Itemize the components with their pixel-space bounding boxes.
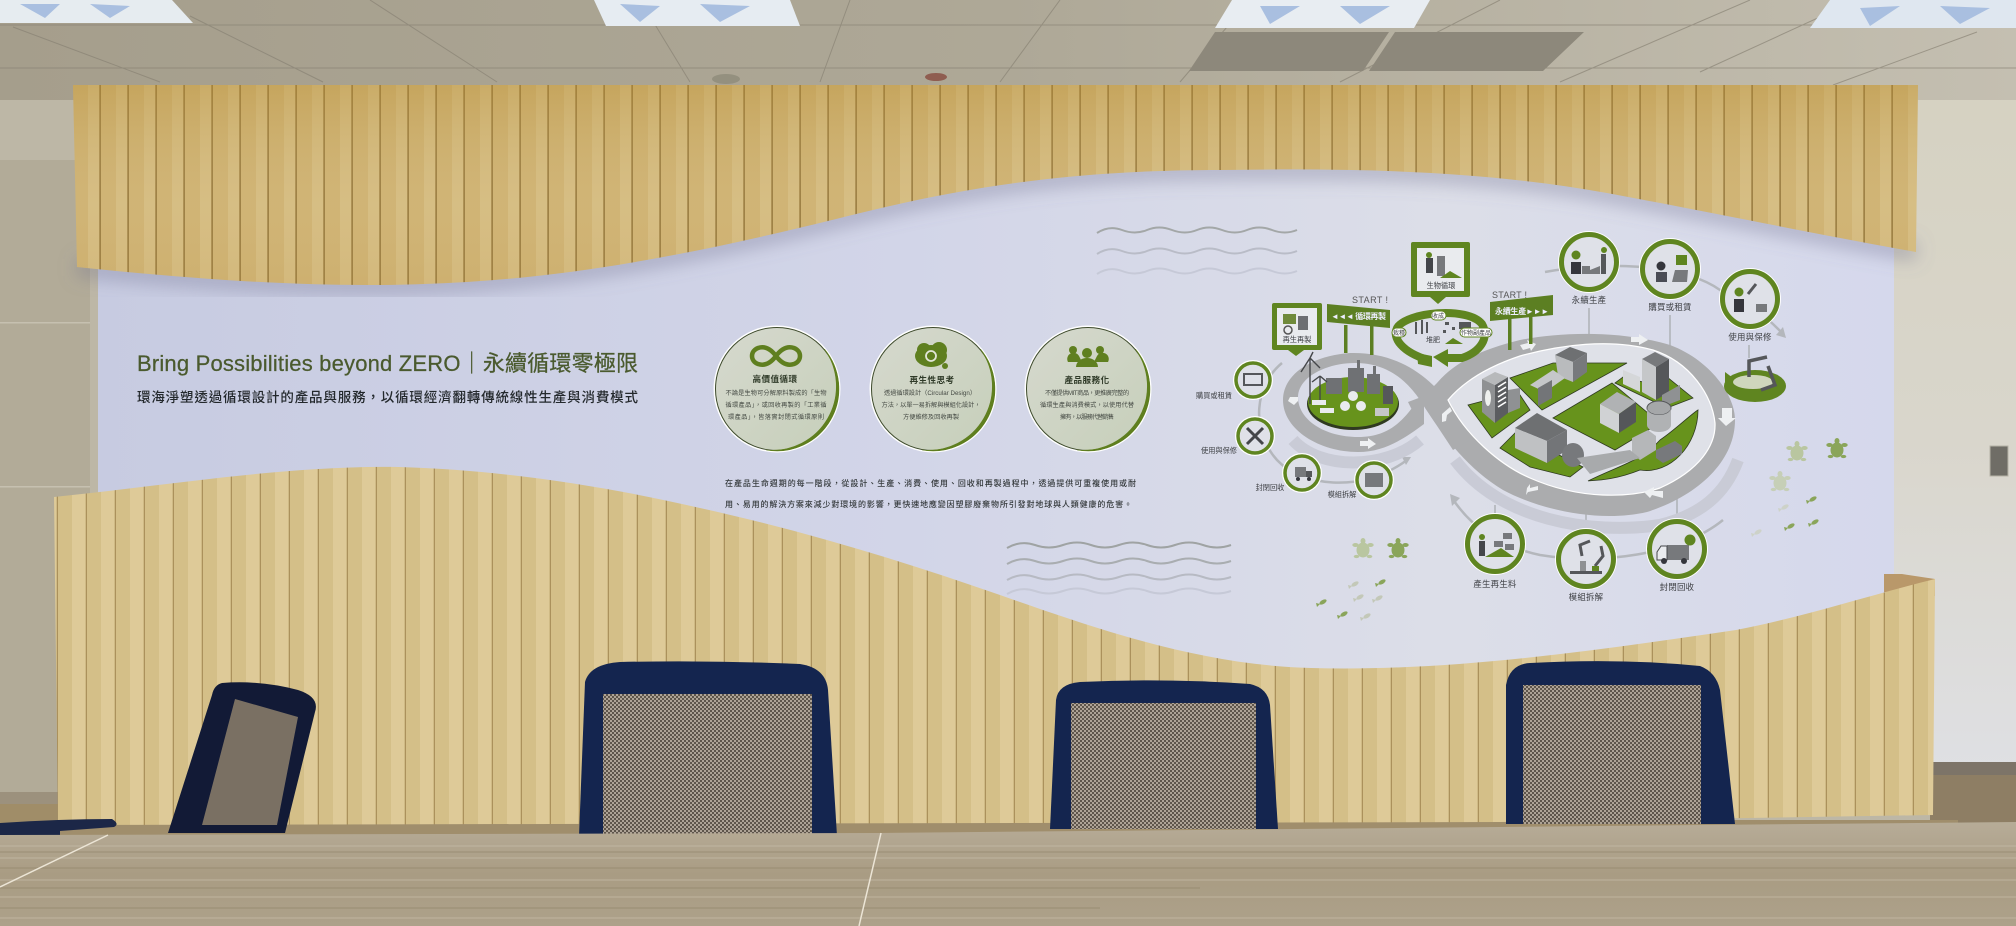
circle: product as a service: 產品服務化 [1065,374,1109,385]
connecting arcs [1259,266,1782,559]
right lobe ground [1448,344,1715,495]
callout: bio cycle [1411,242,1470,304]
callout: recycled remanufacture [1272,303,1322,356]
white road arrows [1288,334,1736,498]
icon circle: buy or rent: 購買或租賃 [1648,302,1692,312]
bio cycle ring: 作物副產品 [1461,329,1491,337]
sign: recycle: ◄◄◄ 循環再製 [1331,311,1386,321]
recycling island [1301,352,1399,430]
top wood panel [73,85,1918,285]
heading: title and subtitle [137,351,638,405]
icon circle: module disassembly [1555,528,1617,602]
icon circle: sustainable production [1558,231,1620,305]
circle: regenerative thinking: 透過循環設計（Circular Design） [884,389,976,397]
small icon circle: closed loop collection [1256,453,1322,493]
chair 3 [1050,680,1278,829]
wall switch [1990,446,2008,476]
icon circle: module disassembly: 模組拆解 [1569,592,1604,602]
icon: people [1067,346,1109,367]
small icon circle: buy or rent [1196,360,1273,400]
left lobe road [1283,353,1470,452]
sign: recycle: START ! [1352,295,1388,305]
city buildings [1482,347,1682,474]
circle: regenerative thinking: 方法，以單一易拆解與模組化設計， [882,401,980,409]
circle: regenerative thinking: 再生性思考 [910,374,954,385]
bottom wood panel [54,467,1935,825]
robot arm platform [1724,357,1786,402]
sign: sustainable production: START ! [1492,290,1527,300]
conference table [0,822,2016,926]
circle: product as a service: 擁有，以服務代替銷售 [1060,413,1114,421]
callout: bio cycle: 生物循環 [1427,281,1455,290]
icon circle: use and maintain: 使用與保修 [1728,332,1772,342]
circle: high value circulation: 高價值循環 [753,373,797,384]
chair 4 [1506,661,1735,824]
chair 1 [168,682,316,833]
sign: sustainable production: 永續生產►►► [1495,306,1549,316]
wall print background [98,160,1894,690]
small icon circle: closed loop collection: 封閉回收 [1256,483,1284,492]
right lobe road [1420,334,1735,516]
callout: recycled remanufacture: 再生再製 [1283,335,1311,344]
circle: high value circulation: 循環產品」，或回收再製的「工業循 [726,401,826,409]
bio cycle ring [1392,311,1492,367]
sprinkler and sensor [712,73,947,84]
icon circle: closed loop collection [1646,518,1708,592]
subtitle: 環海淨塑透過循環設計的產品與服務，以循環經濟翻轉傳統線性生產與消費模式 [137,389,638,405]
circle: regenerative thinking: 方便維修及回收再製 [903,413,959,421]
circle: regenerative thinking [870,326,996,452]
infinity loop diagram [1196,231,1786,602]
icon circle: closed loop collection: 封閉回收 [1660,582,1695,592]
icon circle: sustainable production: 永續生產 [1572,295,1607,305]
sign: sustainable production [1490,290,1553,350]
icon circle: use and maintain [1719,268,1781,342]
sign: recycle [1327,295,1390,355]
small icon circle: use and maintain: 使用與保修 [1201,446,1238,455]
icon: cloud [915,342,948,369]
circle: product as a service: 不僅提供MIT商品，更推廣完整的 [1045,389,1129,397]
circle: product as a service: 循環生產與消費模式，以使用代替 [1040,401,1134,409]
small icon circle: module disassembly: 模組拆解 [1328,490,1356,499]
ceiling lights [0,0,2016,28]
paragraph [725,478,1136,509]
circle: product as a service [1024,326,1152,452]
circle: high value circulation: 不論是生物可分解原料製成的「生物 [726,389,826,397]
bio cycle ring: 收成 [1432,312,1444,320]
icon: infinity [752,347,800,365]
paragraph: 在產品生命週期的每一階段，從設計、生產、消費、使用、回收和再製過程中，透過提供可重複使用或耐 [725,478,1136,488]
small icon circle: module disassembly [1328,460,1394,500]
ceiling vents [1189,32,1584,71]
icon circle: produce recycled material: 產生再生料 [1473,579,1517,589]
small icon circle: use and maintain [1201,416,1275,456]
icon circle: produce recycled material [1464,513,1526,589]
small icon circle: buy or rent: 購買或租賃 [1196,391,1232,400]
chair 2 [579,661,837,836]
loop shadow [1293,440,1738,528]
armrest [0,819,117,835]
bio cycle ring: 堆肥 [1426,335,1440,344]
bio cycle ring: 栽種 [1393,329,1405,337]
green platforms [1468,363,1698,481]
icon circle: buy or rent [1639,238,1701,312]
turtles and fish [1316,438,1848,621]
paragraph: 用、易用的解決方案來減少對環境的影響，更快速地應變因塑膠廢棄物所引發對地球與人類健康的危害。 [725,499,1132,509]
circle: high value circulation [714,326,840,452]
title: Bring Possibilities beyond ZERO｜永續循環零極限 [137,351,638,376]
circle: high value circulation: 環產品」，皆落實封閉式循環原則 [728,413,824,421]
